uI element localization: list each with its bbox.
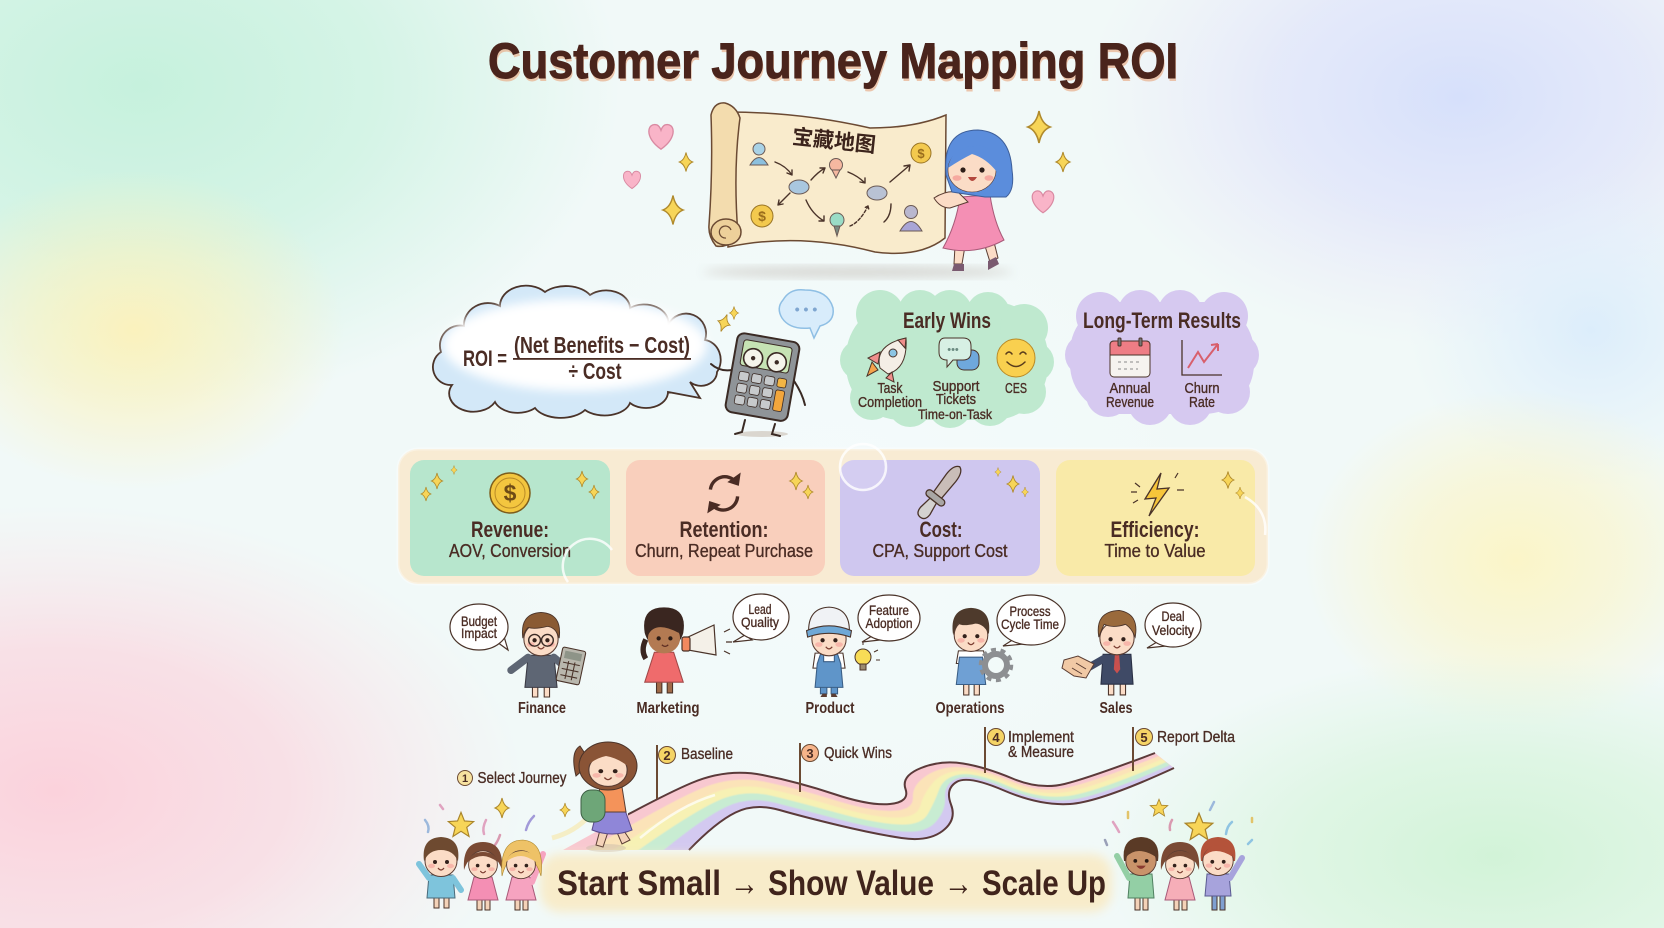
- formula: ROI =: [463, 346, 507, 371]
- title: Customer Journey Mapping ROI: [489, 36, 1179, 92]
- label: Operations: [936, 700, 1005, 717]
- card: efficiency: Time to Value: [1104, 541, 1206, 561]
- step 3: quick wins: Quick Wins: [824, 745, 892, 762]
- formula: [463, 332, 691, 384]
- labels: Time-on-Task: [918, 406, 993, 422]
- road edges: [563, 753, 1174, 850]
- speech bubble: [450, 604, 508, 650]
- character: [1089, 610, 1136, 695]
- kid: pink top: [1161, 842, 1199, 910]
- heading: Early Wins: [903, 308, 991, 333]
- icon: chat bubbles: [939, 338, 979, 370]
- card: revenue: AOV, Conversion: [449, 541, 571, 561]
- label: Marketing: [636, 700, 700, 717]
- speech bubble: Quality: [741, 614, 779, 630]
- step 2: baseline: 2: [663, 748, 671, 763]
- team: operations: [936, 595, 1065, 717]
- step 5: report delta: 5: [1140, 730, 1148, 745]
- labels: Annual: [1110, 380, 1150, 397]
- team: finance: [450, 604, 586, 717]
- character: [807, 607, 851, 697]
- labels: [858, 378, 1027, 422]
- team: product: [806, 595, 920, 717]
- closing banner: →: [944, 864, 973, 903]
- step 5: report delta: [1132, 727, 1235, 771]
- speech bubble: [1145, 603, 1201, 648]
- card: retention: Retention:: [680, 517, 768, 542]
- calculator mascot: [711, 290, 833, 437]
- card: cost: Cost:: [920, 517, 962, 542]
- celebrating kids left: [419, 798, 570, 910]
- kid: blue shirt: [419, 837, 461, 908]
- closing banner: [540, 854, 1112, 912]
- step 4: implement and measure: [984, 727, 1075, 773]
- card: cost: CPA, Support Cost: [872, 541, 1008, 561]
- journey nodes: [750, 143, 931, 236]
- step flags: [458, 727, 1235, 799]
- scroll parchment: [709, 103, 946, 253]
- labels: Tickets: [936, 391, 976, 408]
- speech bubble: [997, 595, 1065, 646]
- closing banner: →: [730, 864, 759, 903]
- title: Customer Journey Mapping ROI: [488, 33, 1178, 89]
- card: retention: [626, 460, 825, 576]
- card: retention: Churn, Repeat Purchase: [635, 541, 813, 561]
- closing banner: Scale Up: [982, 864, 1106, 903]
- labels: Support: [932, 378, 980, 395]
- map title: 宝藏地图: [791, 125, 877, 157]
- icon: megaphone: [682, 625, 732, 655]
- formula: (Net Benefits − Cost): [514, 332, 690, 358]
- kid: pink dress: [464, 842, 502, 910]
- rainbow road: [563, 752, 1174, 851]
- kid: lavender top: [1201, 837, 1242, 910]
- step 2: baseline: [656, 745, 733, 799]
- heading: Long-Term Results: [1083, 308, 1241, 333]
- card: efficiency: Efficiency:: [1110, 517, 1200, 542]
- panel: early wins: [840, 290, 1054, 428]
- icon: rocket: [867, 338, 906, 382]
- speech bubble: Deal: [1162, 608, 1184, 624]
- dashed route arrows: [775, 162, 910, 226]
- card: cost: [840, 460, 1040, 576]
- thought bubble: [779, 290, 833, 338]
- labels: Rate: [1189, 394, 1215, 411]
- card: revenue: [410, 460, 610, 576]
- speech bubble: Lead: [748, 601, 772, 617]
- label: Sales: [1100, 700, 1133, 717]
- speech bubble: Impact: [461, 625, 497, 641]
- girl holding map: [934, 130, 1013, 271]
- speech bubble: Budget: [461, 613, 497, 629]
- treasure map illustration: $: [758, 208, 766, 224]
- speech bubble: Adoption: [866, 615, 912, 631]
- closing banner: Start Small: [557, 864, 721, 903]
- step 4: implement and measure: 4: [992, 730, 1000, 745]
- step 1: select journey: 1: [462, 773, 468, 785]
- closing banner: Show Value: [768, 864, 934, 903]
- speech bubble: Process: [1010, 603, 1050, 619]
- celebrating kids right: [1105, 799, 1252, 910]
- soap bubbles: [563, 444, 1265, 582]
- labels: Revenue: [1106, 394, 1154, 411]
- panel: metric cards: [398, 444, 1268, 584]
- ground shadow: [703, 266, 1013, 278]
- step 3: quick wins: 3: [806, 746, 814, 761]
- step 4: implement and measure: & Measure: [1008, 744, 1074, 761]
- speech bubble: Velocity: [1152, 622, 1194, 638]
- labels: Completion: [858, 394, 922, 411]
- calculator mascot: • • •: [795, 301, 817, 317]
- hiking girl: [552, 742, 637, 852]
- step 2: baseline: Baseline: [681, 746, 733, 763]
- treasure map illustration: [623, 103, 1070, 278]
- label: Finance: [518, 700, 566, 717]
- kid: green top: [1117, 837, 1158, 910]
- character: [511, 612, 586, 697]
- panel: long-term results: [1065, 290, 1259, 425]
- labels: CES: [1005, 380, 1027, 397]
- step 3: quick wins: [799, 743, 892, 792]
- step 5: report delta: Report Delta: [1157, 729, 1235, 746]
- ROI formula cloud: [433, 286, 721, 418]
- icon: smile: [997, 339, 1035, 377]
- icon: chat bubbles: •••: [947, 344, 959, 356]
- icon: handshake: [1062, 656, 1094, 678]
- character: [643, 607, 684, 693]
- character: [952, 608, 989, 695]
- icon: tool: [912, 460, 968, 524]
- icon: calendar: [1110, 338, 1150, 377]
- icon: light bulb: [855, 641, 880, 670]
- labels: Task: [878, 380, 903, 397]
- kid: blonde: [502, 840, 543, 910]
- label: Product: [806, 700, 855, 717]
- labels: Churn: [1184, 380, 1220, 397]
- card: efficiency: [1056, 460, 1255, 576]
- speech bubble: [858, 595, 920, 642]
- speech bubble: Cycle Time: [1001, 616, 1059, 632]
- step 1: select journey: Select Journey: [478, 770, 567, 787]
- icon: refresh arrows: [708, 473, 740, 513]
- treasure map illustration: $: [917, 146, 925, 161]
- card: revenue: Revenue:: [471, 517, 549, 542]
- icon: growth chart: [1182, 340, 1222, 375]
- hearts and sparkles: [623, 111, 1070, 224]
- speech bubble: Feature: [869, 602, 909, 618]
- icon: lightning bolt: [1131, 473, 1184, 516]
- team: marketing: [636, 594, 789, 717]
- icon: gear: [980, 650, 1012, 680]
- team: sales: [1062, 603, 1201, 717]
- icon: coin: [490, 473, 530, 513]
- step 4: implement and measure: Implement: [1008, 729, 1075, 746]
- speech bubble: [733, 594, 789, 642]
- formula: ÷ Cost: [568, 358, 622, 384]
- icon: coin: $: [504, 480, 517, 506]
- labels: [1106, 380, 1220, 411]
